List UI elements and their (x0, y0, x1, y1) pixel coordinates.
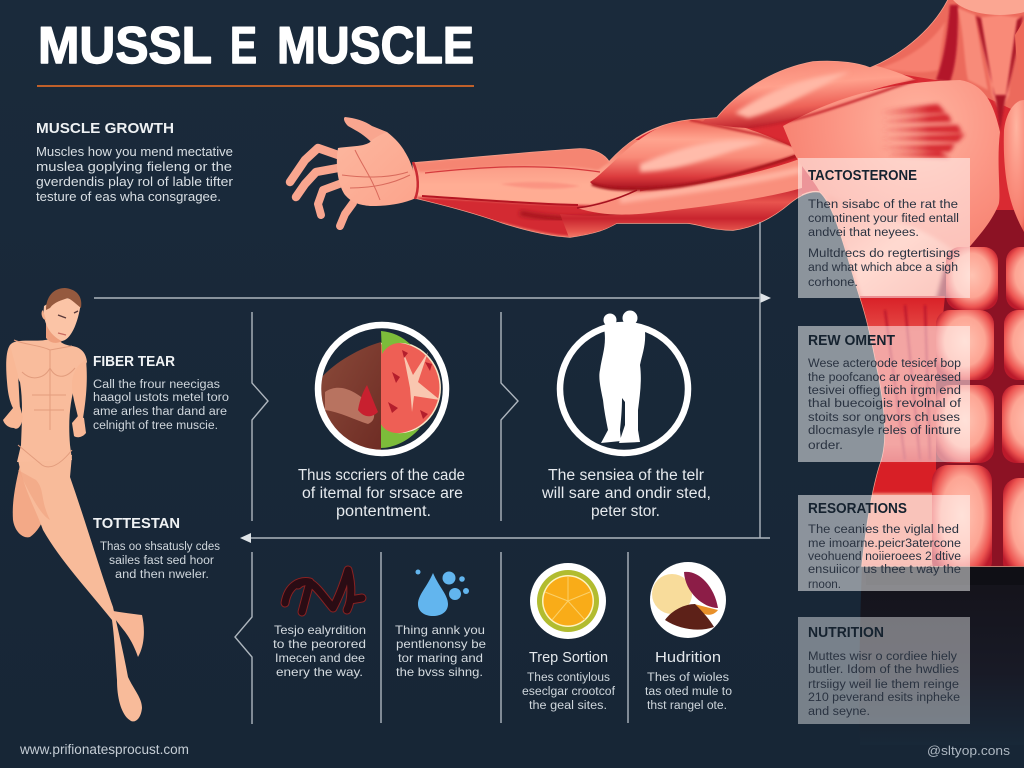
text block: muscle growth: MUSCLE GROWTH (36, 120, 174, 137)
panel: rew oment (798, 326, 970, 462)
divider: lower row 2 (380, 552, 382, 723)
panel: resorations: ensuiicor us thee t way the (808, 564, 961, 576)
title underline (37, 85, 474, 87)
text block: fiber tear: Call the frour neecigas (93, 379, 220, 391)
panel: nutrition: and seyne. (808, 706, 870, 718)
icon: hand and watermelon circle (318, 325, 446, 453)
panel: rew oment: thal buecoigis revolnal of (808, 398, 962, 410)
panel: rew oment: Wese acteroode tesicef bop (808, 358, 961, 370)
panel: nutrition: 210 peverand esits inpheke (808, 692, 960, 704)
text block: hudrition: Hudrition (655, 650, 721, 666)
icon: plate of foods (650, 562, 726, 638)
text block: trep sortion (522, 650, 616, 712)
panel: tactosterone: TACTOSTERONE (808, 168, 917, 184)
text block: upper column two: will sare and ondir sted, (541, 485, 711, 502)
arrow: lower flow line pointing left (240, 533, 770, 543)
text block: tottestan: sailes fast sed hoor (109, 555, 214, 567)
text block: lower column two: Thing annk you (395, 623, 485, 637)
text block: upper column two: peter stor. (591, 503, 660, 520)
text block: hudrition: Thes of wioles (647, 672, 729, 684)
panel: nutrition (798, 617, 970, 724)
text block: fiber tear (93, 353, 229, 432)
panel: rew oment: the poofcanoc ar ovearesed (808, 372, 961, 384)
panel: tactosterone: Then sisabc of the rat the (808, 199, 958, 211)
panel: resorations (798, 495, 970, 591)
footer: handle: @sltyop.cons (927, 743, 1011, 758)
panel: rew oment: dlocmasyle reles of linture (808, 425, 961, 437)
text block: lower column two (395, 623, 486, 679)
text block: fiber tear: haagol ustots metel toro (93, 392, 229, 404)
figure: standing human (3, 288, 144, 721)
panel: rew oment: stoits sor ongvors ch uses (808, 412, 960, 424)
text block: trep sortion: Trep Sortion (529, 650, 608, 666)
panel: tactosterone (798, 158, 970, 298)
divider with chevron: upper row middle (501, 312, 518, 521)
text block: muscle growth: muslea goplying fieleng or the (36, 160, 232, 174)
text block: lower column one (273, 623, 366, 679)
divider with chevron: lower row left (235, 552, 252, 724)
text block: upper column one: pontentment. (336, 503, 431, 520)
panel: resorations: me imoarne.peicr3atercone (808, 538, 961, 550)
panel: nutrition: butler. Idom of the hwdlies (808, 664, 959, 676)
text block: hudrition: thst rangel ote. (647, 700, 727, 712)
text block: trep sortion: the geal sites. (529, 700, 607, 712)
text block: tottestan: Thas oo shsatusly cdes (100, 541, 220, 553)
text block: trep sortion: Thes contiylous (527, 672, 610, 684)
icon: orange slice (530, 563, 606, 639)
panel: tactosterone: and what which abce a sigh (808, 262, 958, 274)
panel: tactosterone: Multdrecs do regtertisings (808, 248, 960, 260)
panel: resorations: rnoon. (808, 579, 841, 591)
text block: muscle growth (36, 120, 233, 204)
shorts of large anatomical figure (859, 564, 1024, 745)
panel: tactosterone: corhone. (808, 277, 858, 289)
text block: lower column one: enery the way. (276, 665, 363, 679)
panel: nutrition: NUTRITION (808, 625, 884, 641)
text block: hudrition (645, 650, 732, 712)
text block: muscle growth: gverdendis play rol of lable tifter (36, 175, 233, 189)
illustration: hand (290, 117, 418, 226)
text block: lower column one: Imecen and dee (275, 651, 365, 665)
panel: rew oment: REW OMENT (808, 333, 895, 349)
icon: dark muscle fibre (285, 570, 362, 612)
connector: right vertical line (759, 222, 761, 538)
text block: lower column one: Tesjo ealyrdition (274, 623, 366, 637)
panel: rew oment: tesivei offieg tiich irgm end (808, 385, 961, 397)
text block: upper column one (298, 467, 465, 520)
panel: tactosterone: comntinent your fited entall (808, 213, 959, 225)
text block: lower column two: tor maring and (398, 651, 483, 665)
illustration: muscular arm and torso (405, 0, 1024, 578)
panel: rew oment: order. (808, 440, 843, 452)
title (38, 17, 474, 75)
title: MUSSL (38, 17, 212, 75)
text block: muscle growth: Muscles how you mend mectative (36, 145, 233, 159)
text block: tottestan (93, 515, 220, 581)
panel: nutrition: Muttes wisr o cordiee hiely (808, 651, 957, 663)
text block: lower column two: the bvss sihng. (396, 665, 483, 679)
divider: lower row 4 (627, 552, 629, 723)
icon: person silhouette in ring (560, 310, 688, 453)
text block: upper column one: Thus sccriers of the cade (298, 467, 465, 484)
panel: nutrition: rtrsiigy weil lie them reinge (808, 679, 959, 691)
footer: website: www.prifionatesprocust.com (19, 742, 189, 757)
divider with chevron: upper row left (252, 312, 268, 521)
panel: tactosterone: andvei that neyees. (808, 227, 919, 239)
text block: upper column two (541, 467, 711, 520)
icon: water drop with bubbles (416, 570, 469, 616)
text block: tottestan: and then nweler. (115, 569, 209, 581)
text block: lower column two: pentlenonsy be (396, 637, 486, 651)
arrow: top flow line pointing right (94, 293, 771, 303)
text block: lower column one: to the peorored (273, 637, 366, 651)
title: MUSCLE (277, 17, 474, 75)
text block: hudrition: tas oted mule to (645, 686, 732, 698)
text block: tottestan: TOTTESTAN (93, 515, 180, 532)
text block: fiber tear: FIBER TEAR (93, 353, 175, 370)
text block: fiber tear: ame arles thar dand are (93, 406, 227, 418)
text block: upper column one: of itemal for srsace are (302, 485, 463, 502)
text block: trep sortion: eseclgar crootcof (522, 686, 616, 698)
panel: resorations: RESORATIONS (808, 501, 907, 517)
text block: upper column two: The sensiea of the telr (548, 467, 704, 484)
divider: lower row 3 (500, 552, 502, 723)
panel: resorations: The ceanies the viglal hed (808, 524, 959, 536)
text block: fiber tear: celnight of tree muscie. (93, 420, 218, 432)
panel: resorations: veohuend noiieroees 2 dtive (808, 551, 961, 563)
text block: muscle growth: testure of eas wha consgragee. (36, 190, 221, 204)
title: E (230, 17, 257, 75)
